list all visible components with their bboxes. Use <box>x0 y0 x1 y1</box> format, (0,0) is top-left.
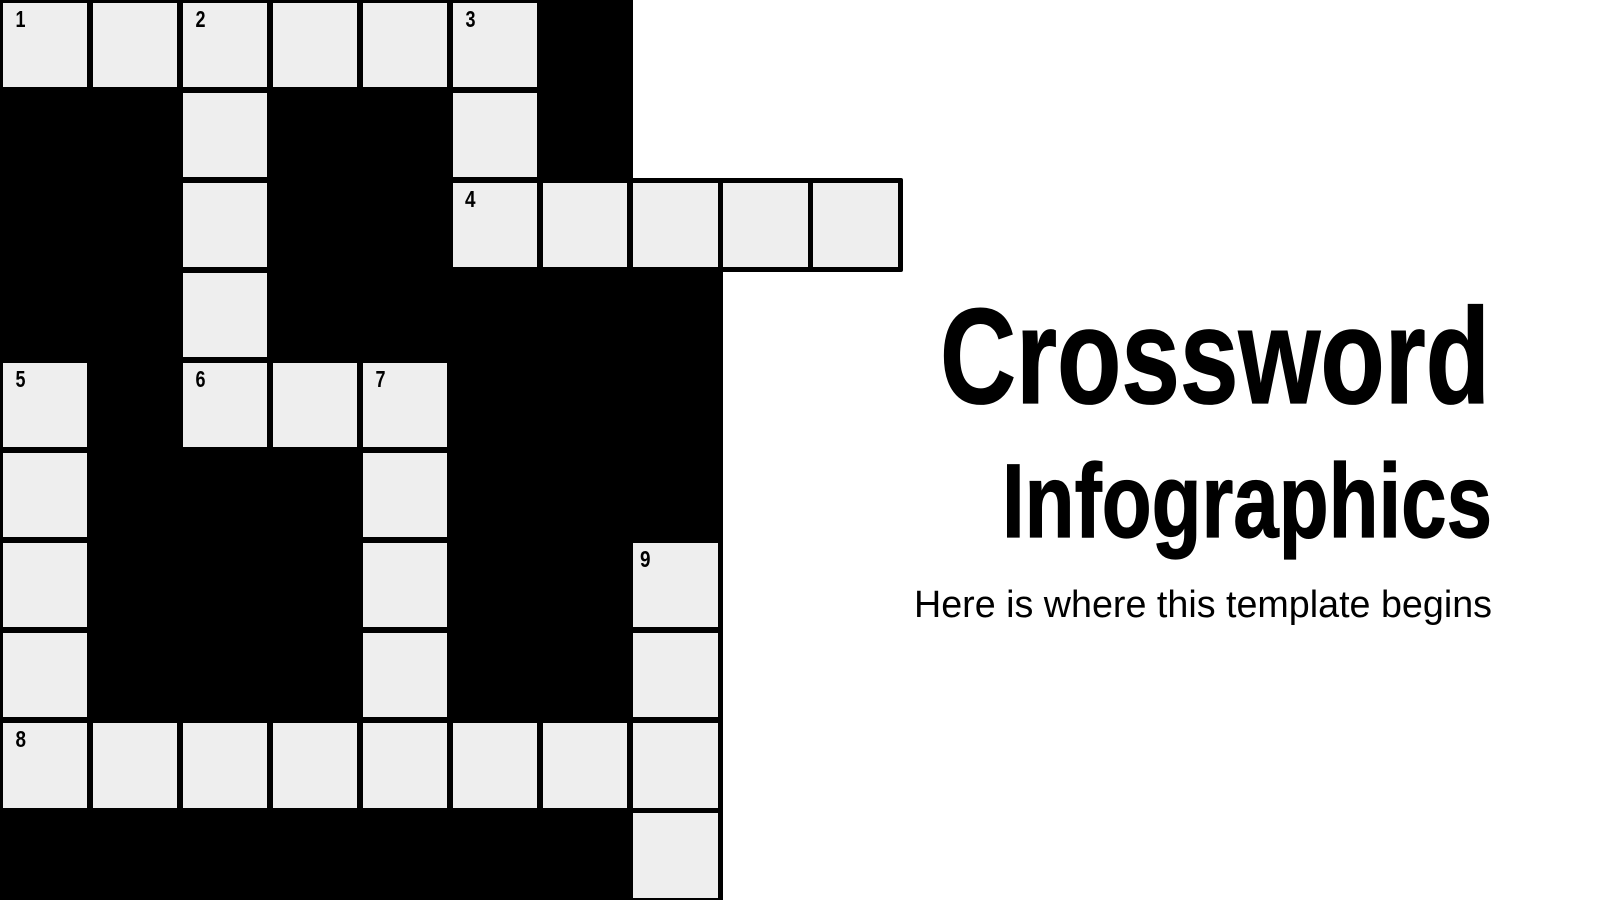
clue numbers: 7 <box>376 366 386 392</box>
across word 8 cells <box>3 723 627 808</box>
down word 5 cells <box>3 363 87 717</box>
across word 1 cells <box>3 3 537 87</box>
down word 2 cells <box>183 93 267 357</box>
clue numbers <box>16 6 650 752</box>
clue numbers: 9 <box>640 546 650 572</box>
clue numbers: 5 <box>16 366 26 392</box>
down word 9 cells <box>633 543 718 898</box>
clue numbers: 4 <box>465 186 476 212</box>
across word 4 cells <box>453 183 898 267</box>
subtitle: Here is where this template begins <box>914 584 1492 626</box>
crossword grid <box>0 0 903 900</box>
clue numbers: 8 <box>16 726 26 752</box>
clue numbers: 2 <box>196 6 206 32</box>
black grid background <box>0 0 903 900</box>
down word 3 cell <box>453 93 537 177</box>
across word 6 cells <box>183 363 447 447</box>
clue numbers: 6 <box>196 366 206 392</box>
clue numbers: 1 <box>16 6 26 32</box>
down word 7 cells <box>363 453 447 717</box>
clue numbers: 3 <box>466 6 476 32</box>
